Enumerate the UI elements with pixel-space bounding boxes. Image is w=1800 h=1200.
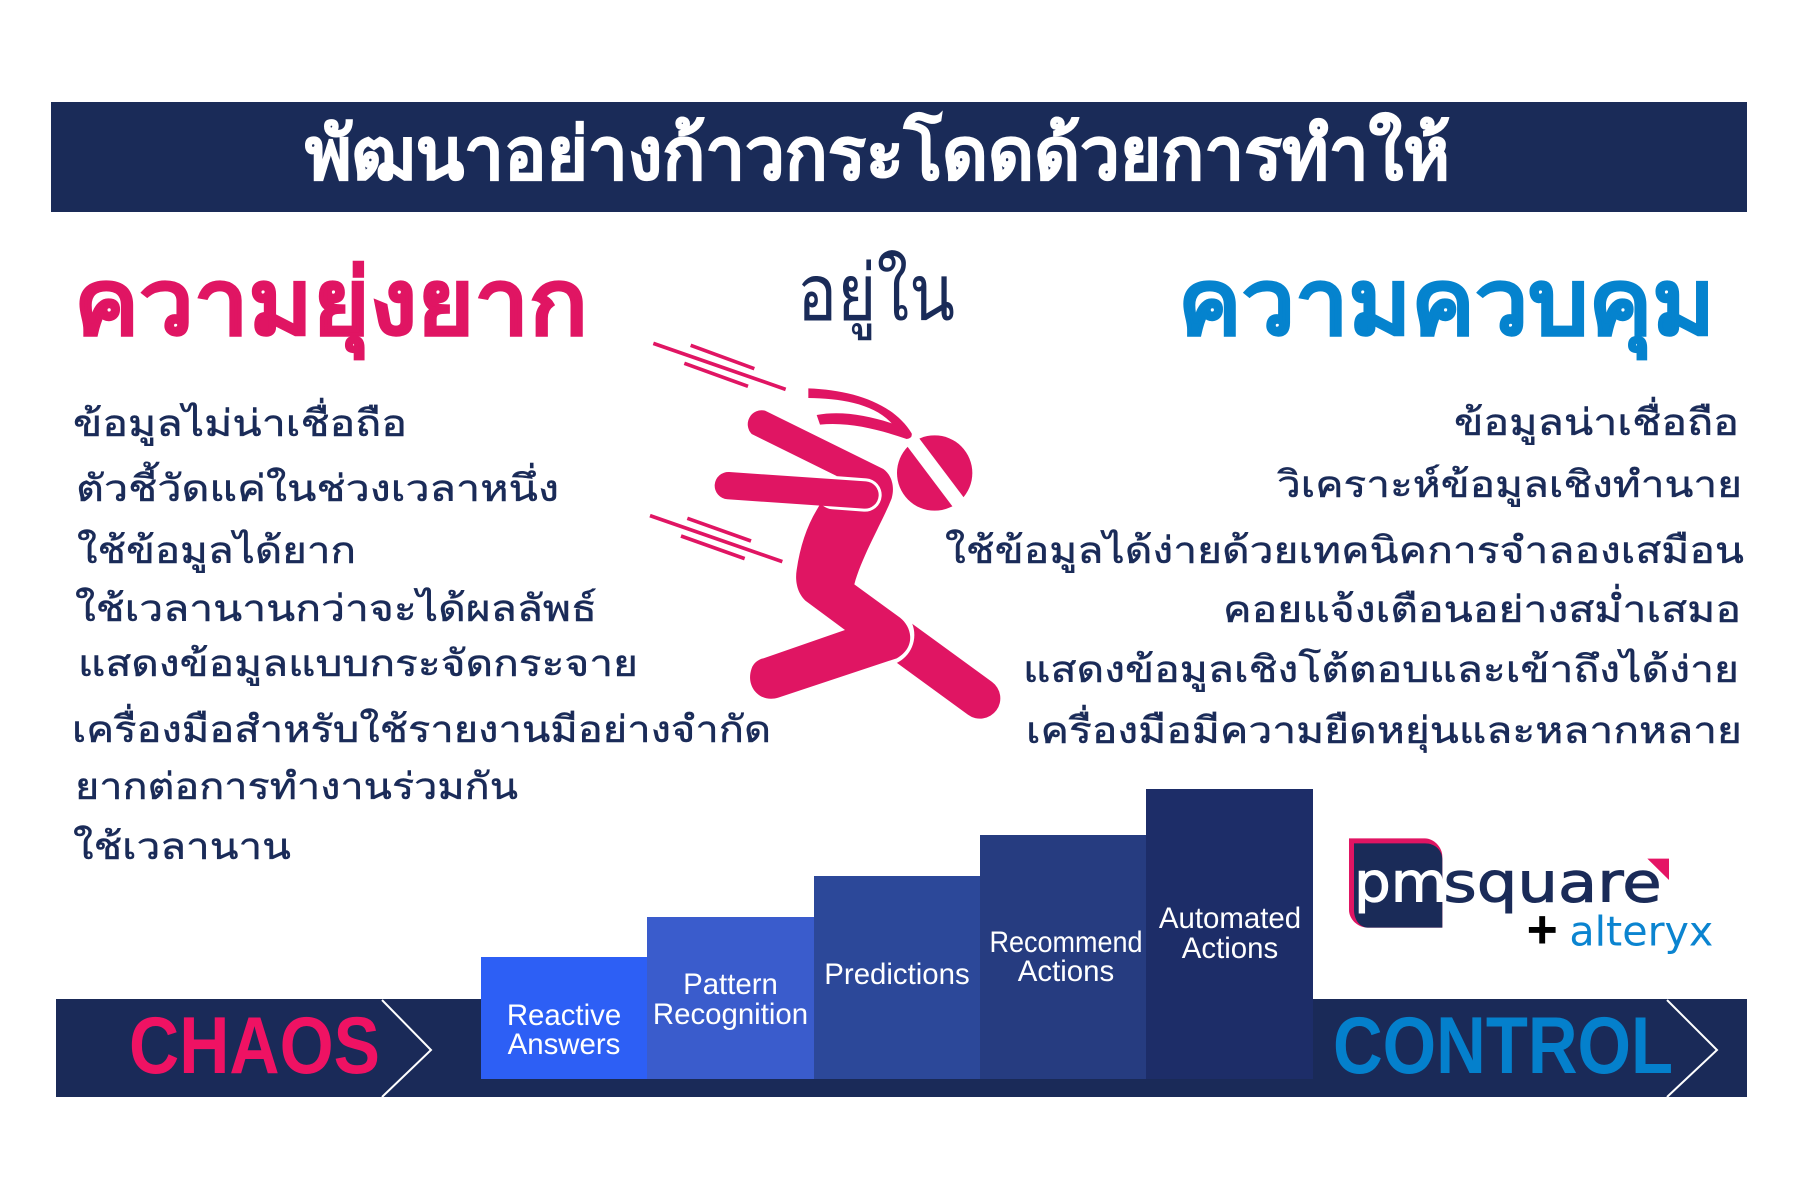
logo: pmsquare + alteryx: pm (1354, 851, 1447, 915)
step: automated actions: Actions (1182, 932, 1278, 965)
step: pattern recognition: Recognition (653, 998, 808, 1031)
list: chaos characteristics: ใช้เวลานาน (73, 825, 291, 867)
step: predictions (814, 876, 980, 1079)
step: automated actions: Automated (1159, 902, 1301, 935)
logo: pmsquare + alteryx (1349, 838, 1713, 960)
list: control characteristics: ใช้ข้อมูลได้ง่ายด้วยเทคนิคการจำลองเสมือน (945, 529, 1744, 573)
step: recommend actions: Recommend (990, 926, 1142, 959)
list: control characteristics (945, 396, 1744, 753)
step: recommend actions: Actions (1018, 955, 1114, 988)
icon: running figure with speed lines (650, 343, 980, 699)
list: chaos characteristics (72, 397, 771, 867)
step: automated actions (1146, 789, 1313, 1079)
step: reactive answers (481, 957, 647, 1079)
heading: chaos: ความยุ่งยาก (74, 252, 588, 360)
step: pattern recognition: Pattern (683, 968, 778, 1001)
list: chaos characteristics: ยากต่อการทำงานร่วมกัน (75, 766, 518, 807)
heading: in: อยู่ใน (797, 249, 955, 340)
list: chaos characteristics: ข้อมูลไม่น่าเชื่อถือ (73, 397, 407, 446)
list: chaos characteristics: แสดงข้อมูลแบบกระจัดกระจาย (78, 643, 638, 686)
logo: pmsquare + alteryx: square (1443, 851, 1662, 915)
list: control characteristics: เครื่องมือมีความยืดหยุ่นและหลากหลาย (1026, 704, 1742, 753)
step: recommend actions (980, 835, 1146, 1079)
logo: pmsquare + alteryx: alteryx (1569, 907, 1713, 955)
bottom bar (56, 999, 1747, 1097)
step: pattern recognition (647, 917, 814, 1079)
title banner: พัฒนาอย่างก้าวกระโดดด้วยการทำให้ (305, 111, 1450, 195)
control label with chevron: CONTROL (1333, 1001, 1673, 1091)
step: reactive answers: Answers (508, 1028, 620, 1061)
list: control characteristics: วิเคราะห์ข้อมูลเชิงทำนาย (1277, 464, 1742, 507)
list: chaos characteristics: ใช้ข้อมูลได้ยาก (77, 529, 356, 573)
title banner (51, 102, 1747, 212)
list: control characteristics: แสดงข้อมูลเชิงโต้ตอบและเข้าถึงได้ง่าย (1023, 648, 1739, 692)
list: chaos characteristics: เครื่องมือสำหรับใช้รายงานมีอย่างจำกัด (72, 703, 771, 750)
logo: pmsquare + alteryx: + (1527, 901, 1558, 960)
list: control characteristics: ข้อมูลน่าเชื่อถือ (1454, 396, 1739, 445)
heading: control: ความควบคุม (1178, 252, 1715, 360)
chaos label with chevron: CHAOS (129, 1001, 380, 1091)
list: chaos characteristics: ใช้เวลานานกว่าจะได้ผลลัพธ์ (75, 587, 597, 629)
step: predictions: Predictions (824, 958, 970, 991)
step: reactive answers: Reactive (507, 999, 621, 1032)
list: chaos characteristics: ตัวชี้วัดแค่ในช่วงเวลาหนึ่ง (76, 461, 559, 509)
list: control characteristics: คอยแจ้งเตือนอย่างสม่ำเสมอ (1223, 583, 1741, 630)
